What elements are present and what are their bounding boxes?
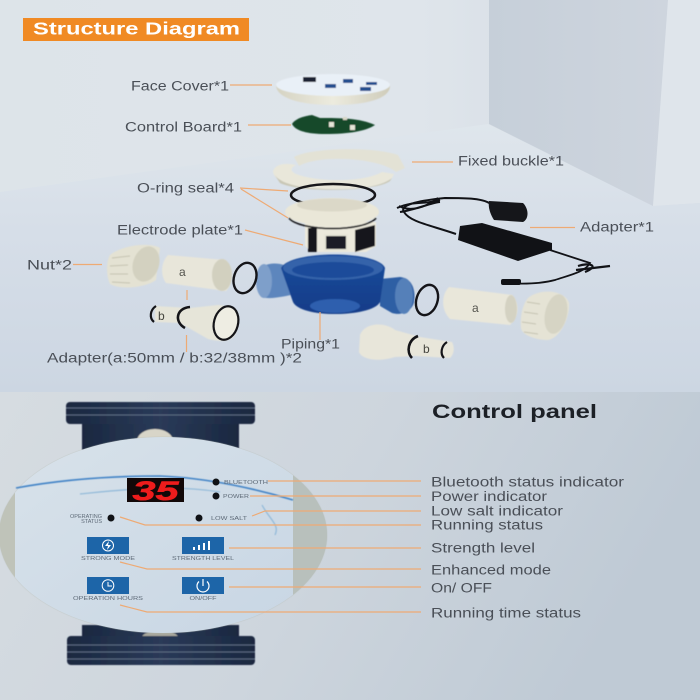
- display: 35: 35: [132, 476, 180, 506]
- device: control panel disc: [0, 435, 333, 635]
- indicator labels: [70, 480, 268, 525]
- labels: structure diagram: O-ring seal*4: [137, 180, 235, 196]
- indicator labels: POWER: [223, 494, 249, 500]
- indicators: [108, 478, 220, 522]
- indicator labels: OPERATING: [70, 514, 102, 520]
- part: power adapter with cables: [397, 198, 610, 285]
- labels: structure diagram: Piping*1: [281, 336, 340, 352]
- leader lines: structure diagram: [73, 85, 575, 352]
- labels: structure diagram: Nut*2: [27, 258, 72, 272]
- heading badge: Structure Diagram: Structure Diagram: [33, 18, 240, 38]
- part: right adapter b: [359, 325, 454, 360]
- button: strength level: [172, 537, 234, 562]
- background: floor: [0, 124, 700, 396]
- button: strong mode: [81, 537, 135, 562]
- part: left tube a: [162, 255, 232, 291]
- part: right o-ring: [412, 282, 442, 318]
- part: o-ring seal upper: [291, 184, 375, 206]
- background: lower panel: [0, 392, 700, 700]
- part: electrode plate: [285, 198, 379, 252]
- labels: structure diagram: Adapter(a:50mm / b:32/38mm )*2: [47, 350, 302, 366]
- part: left nut: [107, 243, 164, 287]
- labels: control panel: Bluetooth status indicator: [431, 474, 625, 490]
- labels: control panel: Strength level: [431, 540, 535, 556]
- part: piping: [256, 254, 414, 314]
- button: operation hours: OPERATION HOURS: [73, 596, 143, 602]
- labels: control panel: Running status: [431, 518, 543, 532]
- indicator labels: BLUETOOTH: [224, 480, 268, 486]
- indicator labels: LOW SALT: [211, 516, 248, 522]
- part: right tube a: a: [472, 301, 479, 315]
- labels: control panel: Running time status: [431, 606, 581, 620]
- button: on/off: [182, 577, 224, 602]
- part: left adapter b: [151, 303, 242, 343]
- device: pipe top: [66, 402, 255, 453]
- button: strength level: STRENGTH LEVEL: [172, 556, 234, 562]
- button: strong mode: STRONG MODE: [81, 556, 135, 562]
- part: left o-ring: [230, 260, 260, 296]
- background: wall: [0, 0, 700, 205]
- button: operation hours: [73, 577, 143, 602]
- heading badge: Structure Diagram: [23, 18, 249, 41]
- button: on/off: ON/OFF: [190, 596, 217, 602]
- indicator labels: STATUS: [81, 519, 102, 525]
- part: face cover: [276, 74, 390, 105]
- labels: structure diagram: Face Cover*1: [131, 78, 229, 94]
- part: right tube a: [443, 287, 517, 325]
- display: 35: [127, 476, 184, 506]
- heading: Control panel: Control panel: [432, 401, 597, 423]
- device: pipe bottom: [67, 625, 255, 665]
- labels: control panel: Power indicator: [431, 489, 548, 504]
- part: left adapter b: b: [158, 309, 165, 323]
- labels: control panel: [431, 474, 625, 620]
- labels: structure diagram: Adapter*1: [580, 220, 654, 234]
- labels: structure diagram: Electrode plate*1: [117, 222, 243, 238]
- leader lines: control panel: [120, 481, 421, 612]
- background: right wall: [653, 0, 700, 206]
- labels: structure diagram: [27, 78, 654, 366]
- labels: structure diagram: Control Board*1: [125, 120, 242, 134]
- background: white box: [489, 0, 668, 206]
- labels: control panel: Enhanced mode: [431, 562, 551, 578]
- part: right nut: [521, 292, 571, 340]
- part: right adapter b: b: [423, 342, 430, 356]
- part: left tube a: a: [179, 265, 186, 279]
- labels: control panel: Low salt indicator: [431, 504, 564, 518]
- part: control board: [292, 115, 375, 134]
- labels: structure diagram: Fixed buckle*1: [458, 154, 564, 168]
- part: fixed buckle: [273, 149, 405, 190]
- labels: control panel: On/ OFF: [431, 580, 492, 596]
